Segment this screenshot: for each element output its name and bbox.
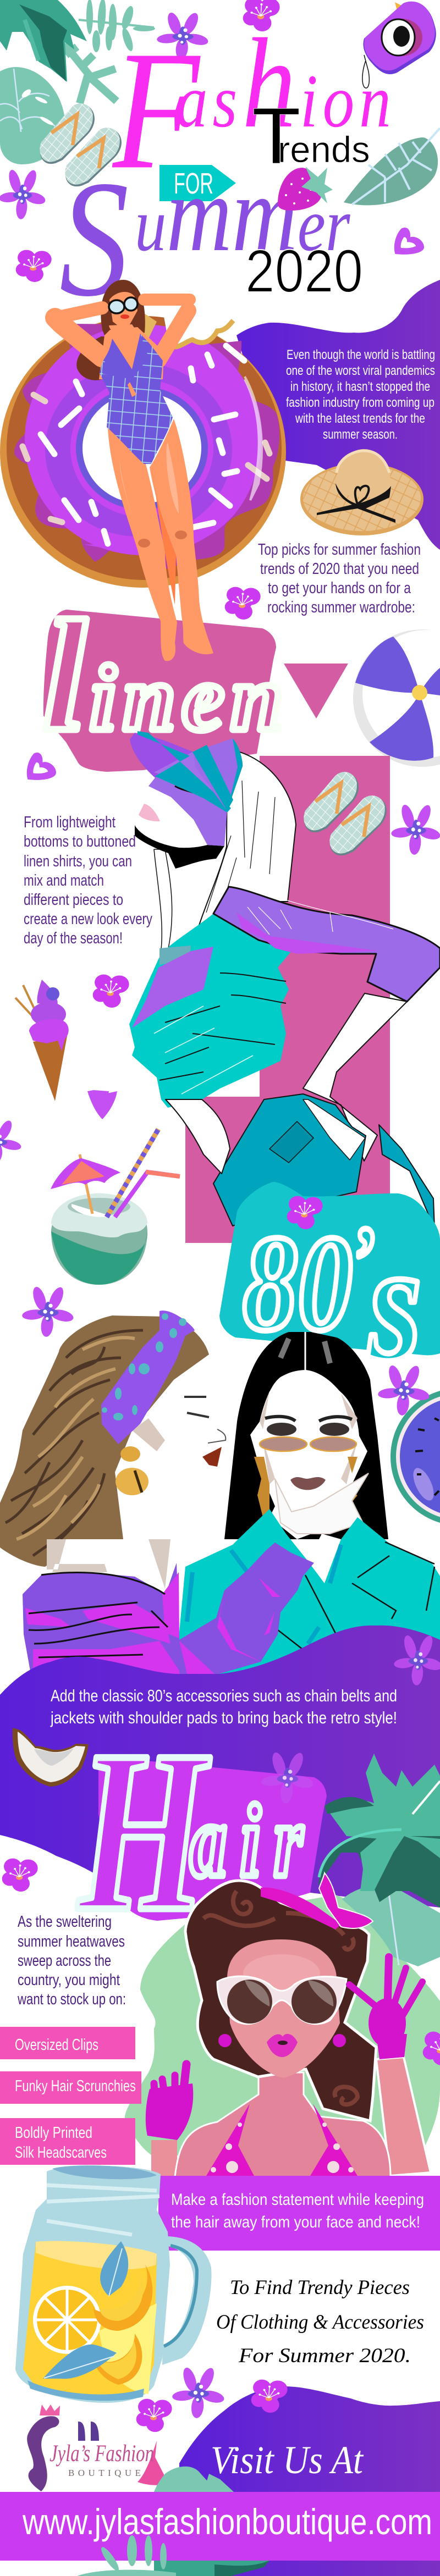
list item: funky hair scrunchies: Funky Hair Scrunchies <box>15 2077 136 2095</box>
text: linen description: From lightweight <box>24 814 116 831</box>
text: 80's description <box>50 1686 397 1727</box>
lemon slices <box>33 2265 152 2385</box>
text: linen description: day of the season! <box>24 930 123 947</box>
lips <box>139 804 160 821</box>
lemonade <box>23 2242 157 2397</box>
right woman's purple sleeve <box>179 1543 314 1674</box>
pin-up woman <box>146 1873 431 2177</box>
icon: heart <box>87 1090 117 1119</box>
icon: heart <box>27 753 56 780</box>
icon: flower <box>391 803 440 855</box>
tag: FOR: FOR <box>174 167 213 200</box>
arm <box>303 993 407 1161</box>
pink triangle <box>284 664 348 718</box>
face <box>250 1370 367 1539</box>
purple mask <box>148 761 227 846</box>
face <box>132 1355 227 1517</box>
icon: hibiscus <box>287 1196 323 1229</box>
icon: flower <box>156 11 210 60</box>
icon: hibiscus <box>16 250 52 282</box>
list item: silk headscarves <box>0 2118 135 2165</box>
face <box>227 1939 340 2078</box>
right woman's teal jacket <box>178 1509 440 1674</box>
icon: leaf <box>344 128 440 205</box>
icon: hibiscus <box>2 1859 38 1892</box>
right glove <box>349 1957 422 2017</box>
decoration: green blob <box>125 1895 440 2160</box>
purple blob: intro panel <box>237 280 440 550</box>
title word: 2020: 2020 <box>245 237 363 305</box>
text: linen description: linen shirts, you can <box>24 853 132 870</box>
top <box>129 914 292 1108</box>
title word: Fashion: hion <box>242 12 396 154</box>
title word: Fashion: as <box>176 59 242 143</box>
bottom tropical leaves <box>77 2535 270 2576</box>
handle <box>162 2236 211 2365</box>
arms <box>55 300 190 360</box>
icon: heart <box>394 228 424 255</box>
list item: silk headscarves: Silk Headscarves <box>15 2144 107 2162</box>
list item: oversized clips: Oversized Clips <box>15 2036 98 2054</box>
sunglasses <box>109 297 138 313</box>
headband <box>101 1311 195 1444</box>
title word: Fashion: F <box>111 15 201 204</box>
bottom tropical leaves above banner <box>154 2467 234 2492</box>
icon: strawberry <box>278 167 333 211</box>
face <box>109 292 138 329</box>
woman in linen outfit <box>129 731 440 1229</box>
sleeve <box>213 887 440 1002</box>
icon: hibiscus <box>93 975 129 1008</box>
list item: oversized clips <box>0 2027 135 2059</box>
heading: 80's: ’ <box>350 1208 375 1312</box>
logo: Jyla's Fashion Boutique: BOUTIQUE <box>68 2468 141 2478</box>
icon: hibiscus <box>136 2399 172 2432</box>
tropical leaves: right of Hair <box>318 1754 440 1966</box>
left woman's neck and shoulder <box>47 1539 170 1594</box>
legs <box>108 428 177 661</box>
icon: hibiscus <box>225 587 261 620</box>
heading: 80's: s <box>366 1208 422 1396</box>
text: intro <box>286 347 435 442</box>
woman with headband <box>0 1311 227 1567</box>
text: find trendy pieces: To Find Trendy Pieces <box>230 2276 410 2299</box>
icon: flower <box>377 1364 431 1416</box>
text: find trendy pieces: For Summer 2020. <box>238 2345 411 2367</box>
title word: Trends: T <box>252 91 301 180</box>
body <box>376 2057 431 2176</box>
lips <box>267 2034 298 2057</box>
title <box>59 12 396 331</box>
cap <box>130 733 194 778</box>
hair <box>0 1315 209 1567</box>
text: top picks <box>258 541 421 616</box>
icon: camera <box>362 2 436 88</box>
title word: Summer: u <box>135 183 167 267</box>
decoration: flip flops <box>304 772 387 855</box>
sprinkles <box>41 346 244 544</box>
text: hair description: want to stock up on: <box>17 1991 126 2008</box>
heading: linen: linen <box>42 588 290 764</box>
face and neck <box>135 825 224 869</box>
text: hair description: As the sweltering <box>18 1913 112 1931</box>
banner: hair statement <box>158 2176 440 2251</box>
text: find trendy pieces <box>216 2276 424 2367</box>
dress straps <box>206 2104 358 2176</box>
earring <box>116 1446 148 1495</box>
hair <box>224 1332 388 1539</box>
purple blob: visit us <box>179 2386 440 2576</box>
banner shape: linen <box>43 610 276 772</box>
icon: flower <box>0 1119 23 1164</box>
back hair <box>76 280 145 380</box>
eyes <box>265 1417 352 1421</box>
teal banner: 80's <box>219 1182 440 1355</box>
bandana <box>261 1873 373 1930</box>
lower left arm <box>166 1099 230 1174</box>
swimsuit <box>100 334 173 464</box>
title word: Trends: rends <box>278 129 370 170</box>
banner shape: Hair <box>98 1758 327 1921</box>
icon: hibiscus <box>251 2380 288 2413</box>
woman with black hair and glasses <box>224 1332 388 1539</box>
sunglasses <box>217 1976 346 2024</box>
pink backdrop rectangle <box>185 756 390 1243</box>
text: linen description: create a new look every <box>24 910 152 928</box>
icon: flower <box>172 2366 226 2419</box>
glasses <box>260 1437 356 1451</box>
icon: ice cream <box>15 980 69 1101</box>
heading: 80's: 80 <box>243 1207 353 1359</box>
woman on donut <box>55 280 213 661</box>
decoration: top-left tropical leaves <box>0 0 155 164</box>
mint leaves <box>100 2241 128 2296</box>
heading: Hair: H <box>75 1703 212 1959</box>
chains <box>253 1457 358 1539</box>
left woman's purple shirt <box>23 1563 182 1674</box>
title word: Summer: mmer <box>167 154 350 274</box>
hat <box>300 449 424 535</box>
decoration: flip flops <box>40 103 122 186</box>
left glove <box>154 2064 186 2103</box>
heading: Hair: air <box>190 1783 316 1898</box>
icon: coconut piece <box>13 1728 89 1787</box>
shorts <box>213 1094 366 1226</box>
logo: Jyla's Fashion Boutique <box>27 2404 168 2491</box>
icing <box>14 324 279 570</box>
list item: funky hair scrunchies <box>0 2071 141 2104</box>
banner: website <box>0 2492 440 2561</box>
purple wave panel: 80's text <box>0 1626 440 1908</box>
hair <box>191 749 296 954</box>
title word: Summer: S <box>59 147 129 331</box>
torso <box>99 327 164 379</box>
text: hair description <box>17 1913 126 2008</box>
text: visit us at: Visit Us At <box>211 2438 364 2482</box>
text: linen description: mix and match <box>24 872 104 889</box>
icon: hibiscus <box>243 0 280 31</box>
lips <box>290 1477 326 1490</box>
list item: silk headscarves: Boldly Printed <box>15 2124 92 2142</box>
icon: flower <box>21 1285 75 1337</box>
beach ball <box>353 629 440 767</box>
icon: coconut drink <box>51 1129 180 1285</box>
watermelon <box>391 1388 440 1525</box>
text: linen description <box>24 814 152 947</box>
lemonade jar <box>15 2165 211 2403</box>
text: hair description: country, you might <box>18 1971 120 1989</box>
text: intro: summer season. <box>323 427 398 442</box>
icon: flower <box>0 168 46 220</box>
text: hair description: summer heatwaves <box>18 1933 125 1950</box>
donut float <box>0 308 286 588</box>
earrings <box>218 2034 346 2047</box>
text: linen description: bottoms to buttoned <box>24 833 136 850</box>
text: hair description: sweep across the <box>18 1952 111 1970</box>
icon: flower <box>394 1634 440 1686</box>
text: linen description: different pieces to <box>24 891 123 909</box>
icon: hibiscus <box>423 2032 440 2065</box>
glass <box>15 2166 170 2403</box>
bite <box>162 308 242 346</box>
icon: flower <box>261 1751 315 1804</box>
logo: Jyla's Fashion Boutique: Jyla’s Fashion <box>50 2441 154 2467</box>
hair <box>185 1881 376 2121</box>
text: find trendy pieces: Of Clothing & Accessories <box>216 2311 424 2334</box>
